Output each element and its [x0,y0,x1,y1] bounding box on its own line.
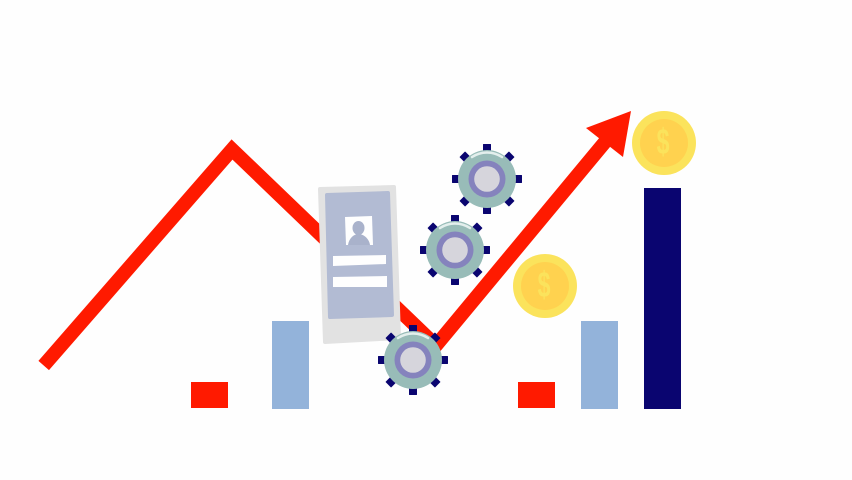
bar: red short left [191,382,228,408]
icon: gear top [452,144,522,214]
bar: blue left [272,321,309,409]
icon: coin top: $ [657,123,670,162]
icon: gear bottom [378,326,448,394]
bar: red short right [518,382,555,408]
text line 1 [333,255,386,266]
text line 2 [333,276,387,287]
icon: profile card [320,187,399,342]
icon: coin top [632,111,696,175]
bar: blue right [581,321,618,409]
bar: navy tall [644,188,681,409]
icon: profile photo [345,216,373,245]
icon: coin bottom [513,254,577,318]
arrow: red trend line [44,111,631,366]
icon: gear middle [420,216,490,284]
icon: coin bottom: $ [538,266,551,305]
